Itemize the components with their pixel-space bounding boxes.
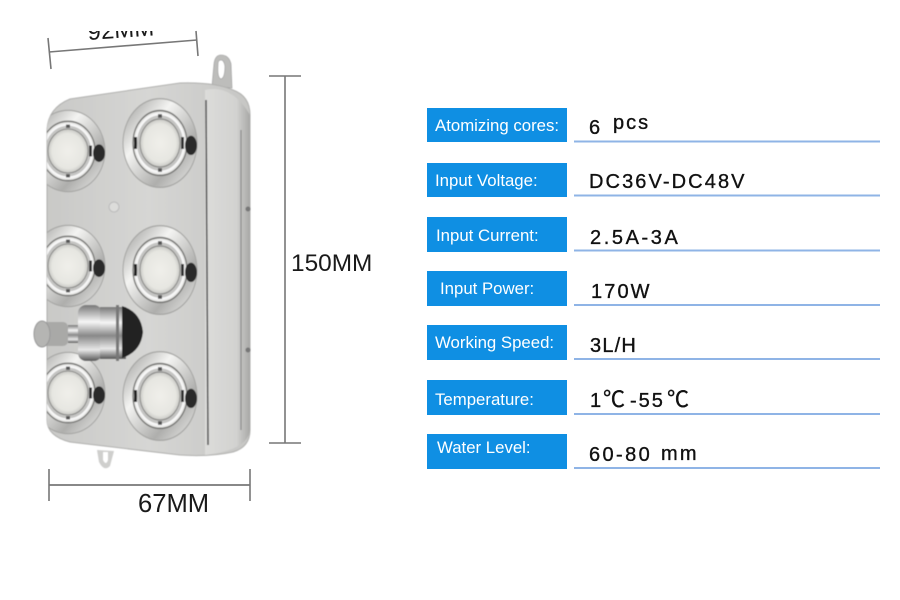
dimension: depth 67MM: 67MM [138, 490, 209, 518]
module body [47, 83, 250, 456]
product photo: atomizer module [31, 55, 250, 468]
spec row: temperature: 1 [590, 390, 603, 412]
module side panel [205, 89, 250, 455]
spec row: water level [427, 434, 880, 469]
spec row: working speed: 3L/H [590, 335, 637, 357]
spec row: temperature [427, 380, 880, 415]
mounting tab bottom [97, 450, 114, 468]
spec row: temperature: ℃ [667, 387, 689, 412]
spec row: working speed: Working Speed: [435, 333, 554, 352]
spec row: input voltage: DC36V-DC48V [589, 171, 747, 193]
spec row: temperature: -55 [630, 390, 665, 412]
spec row: working speed [427, 325, 880, 360]
spec row: input voltage [427, 163, 880, 197]
spec row: atomizing cores: pcs [613, 112, 650, 134]
dimension: height 150MM: 150MM [291, 250, 372, 277]
spec row: temperature: ℃ [603, 387, 625, 412]
spec row: atomizing cores [427, 108, 880, 142]
mounting tab top [212, 55, 232, 88]
spec row: input power: 170W [591, 281, 652, 303]
spec row: input current: Input Current: [436, 226, 539, 245]
dimension: width 92MM (top) [47, 30, 199, 70]
spec row: atomizing cores: Atomizing cores: [435, 116, 559, 135]
spec row: input current: 2.5A-3A [590, 227, 680, 249]
dimension: width 92MM (top): 92MM [87, 14, 155, 46]
spec row: water level: 60-80 [589, 444, 652, 466]
spec row: atomizing cores: 6 [589, 117, 602, 139]
atomizing discs [31, 99, 197, 440]
spec row: water level: Water Level: [437, 438, 531, 457]
spec row: temperature: Temperature: [435, 390, 534, 409]
spec row: input current [427, 217, 880, 252]
spec row: input power: Input Power: [440, 279, 534, 298]
spec row: water level: mm [661, 443, 699, 465]
cable connector [34, 305, 143, 361]
spec row: input power [427, 271, 880, 306]
spec row: input voltage: Input Voltage: [435, 171, 538, 190]
